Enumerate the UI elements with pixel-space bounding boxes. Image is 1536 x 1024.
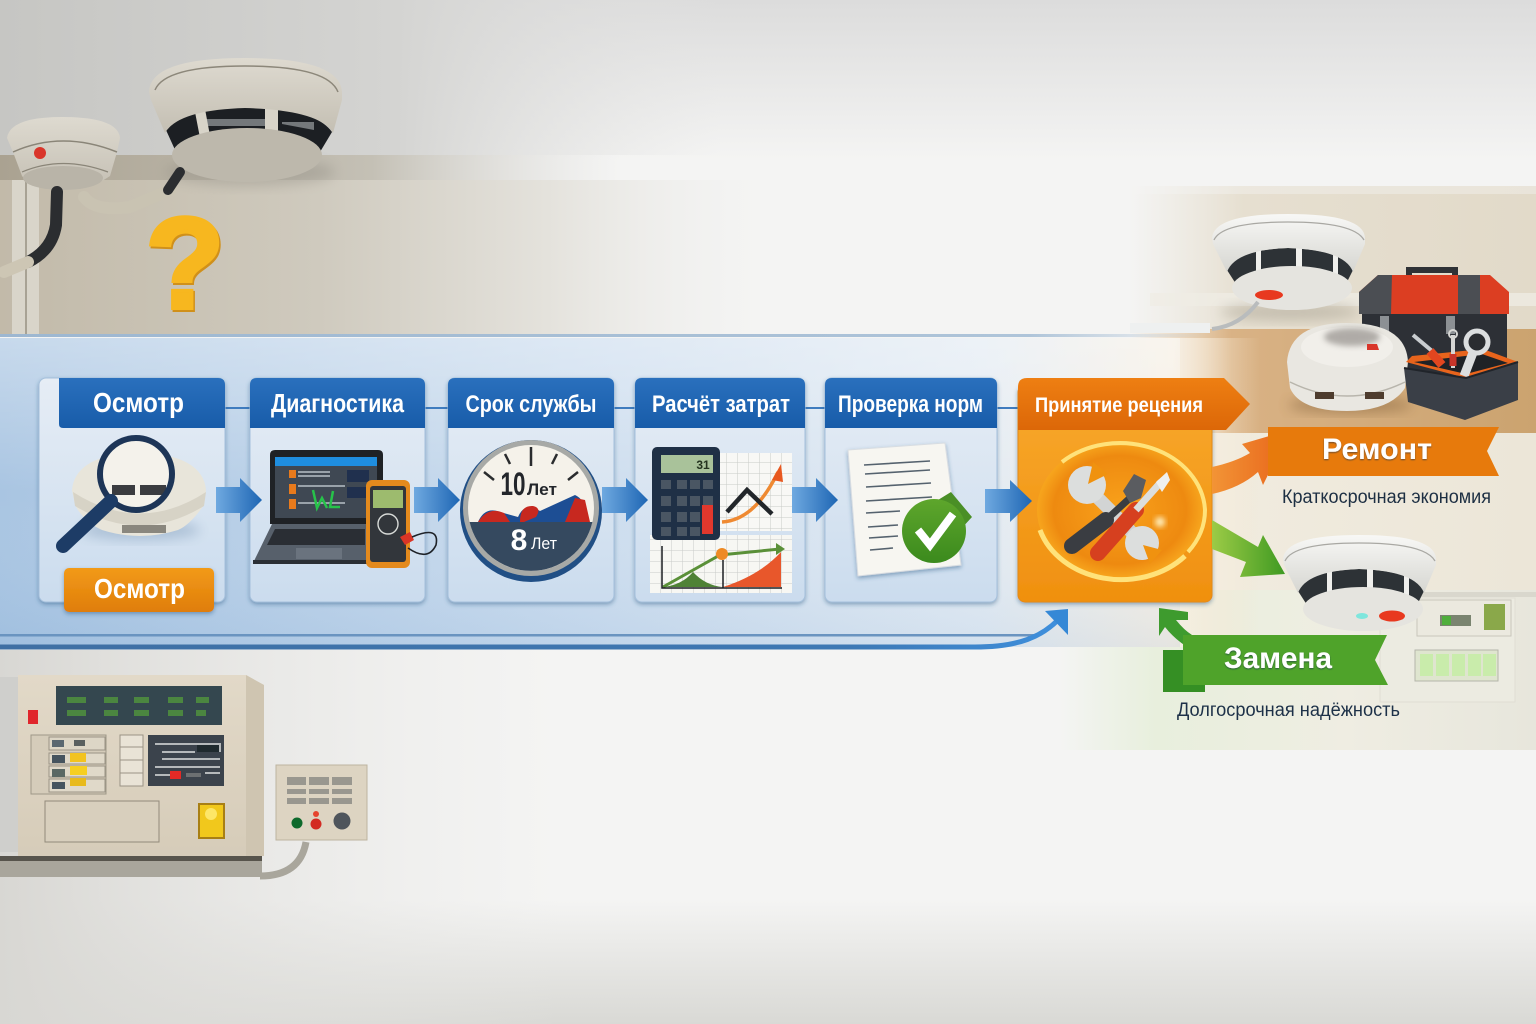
ceiling and wall, top left xyxy=(0,155,760,335)
gauge: 10 years vs 8 years: Лет xyxy=(531,534,557,553)
chart: upper line chart xyxy=(716,453,792,531)
text: long-term reliability: Долгосрочная надёжность xyxy=(1177,700,1400,721)
wall keypad xyxy=(260,765,367,876)
fire control panel xyxy=(0,675,264,877)
icon: dusty detector on shelf xyxy=(1287,323,1412,413)
gauge: 10 years vs 8 years: 10 xyxy=(500,466,526,502)
gauge: 10 years vs 8 years: Лет xyxy=(527,480,557,499)
panel: step 5 norms check xyxy=(825,378,997,602)
arrow: back from replacement xyxy=(1159,608,1205,692)
right scene backdrop xyxy=(1060,186,1536,750)
icon: calculator: 31 xyxy=(696,458,710,472)
heading: step 1 xyxy=(59,378,225,428)
icon: question mark: ? xyxy=(147,192,226,338)
arrow: to replacement xyxy=(1212,520,1285,577)
heading: step 4: Расчёт затрат xyxy=(652,391,790,418)
blue process band xyxy=(0,334,1260,647)
icon: document xyxy=(848,443,961,576)
arrows between steps xyxy=(216,478,1032,522)
panel: step 4 cost calculation xyxy=(635,378,805,602)
heading: step 1: Осмотр xyxy=(93,387,184,418)
panel: step 6 decision xyxy=(1018,378,1250,602)
heading: step 6: Принятие рецения xyxy=(1035,394,1203,417)
icon: green check mark xyxy=(902,492,972,563)
ribbon: replacement: Замена xyxy=(1224,642,1332,675)
chart: lower area chart xyxy=(650,535,792,593)
control panel, right xyxy=(1380,592,1536,702)
ribbon: repair xyxy=(1268,427,1499,476)
icon: new detector with green light xyxy=(1283,535,1436,631)
connector lines between steps xyxy=(225,407,1018,409)
icon: calculator xyxy=(652,447,720,540)
heading: step 6 xyxy=(1018,378,1250,430)
curved arrow along the band bottom xyxy=(0,609,1068,647)
button: orange label: Осмотр xyxy=(94,573,185,604)
icon: question mark: ? xyxy=(145,190,225,336)
icon: toolbox xyxy=(1359,270,1509,380)
detector small, top left xyxy=(7,117,120,190)
icon: open tool tray xyxy=(1404,330,1518,420)
cables xyxy=(4,172,180,272)
text: short-term savings: Краткосрочная экономия xyxy=(1282,487,1491,508)
button: orange label xyxy=(64,568,214,612)
panel: step 3 service life xyxy=(448,378,614,602)
heading: step 5 xyxy=(825,378,997,428)
icon: detector under magnifier xyxy=(63,438,206,546)
gauge: 10 years vs 8 years: 8 xyxy=(511,524,527,557)
heading: step 5: Проверка норм xyxy=(838,391,983,418)
heading: step 2: Диагностика xyxy=(271,388,404,418)
heading: step 4 xyxy=(635,378,805,428)
heading: step 2 xyxy=(250,378,425,428)
ribbon: repair: Ремонт xyxy=(1322,433,1432,466)
detector large, top left xyxy=(149,58,342,186)
icon: new detector, top right xyxy=(1212,214,1365,321)
heading: step 3: Срок службы xyxy=(466,391,596,418)
ribbon: replacement xyxy=(1183,635,1388,685)
icon: glowing disc with tools xyxy=(1037,442,1205,580)
icon: laptop and multimeter xyxy=(253,450,436,568)
arrow: to repair xyxy=(1212,430,1290,494)
panel: step 2 diagnostics xyxy=(250,378,436,602)
heading: step 3 xyxy=(448,378,614,428)
panel: step 1 inspection xyxy=(39,378,225,612)
cable and duct, right xyxy=(1130,302,1258,333)
gauge: 10 years vs 8 years xyxy=(460,440,602,582)
